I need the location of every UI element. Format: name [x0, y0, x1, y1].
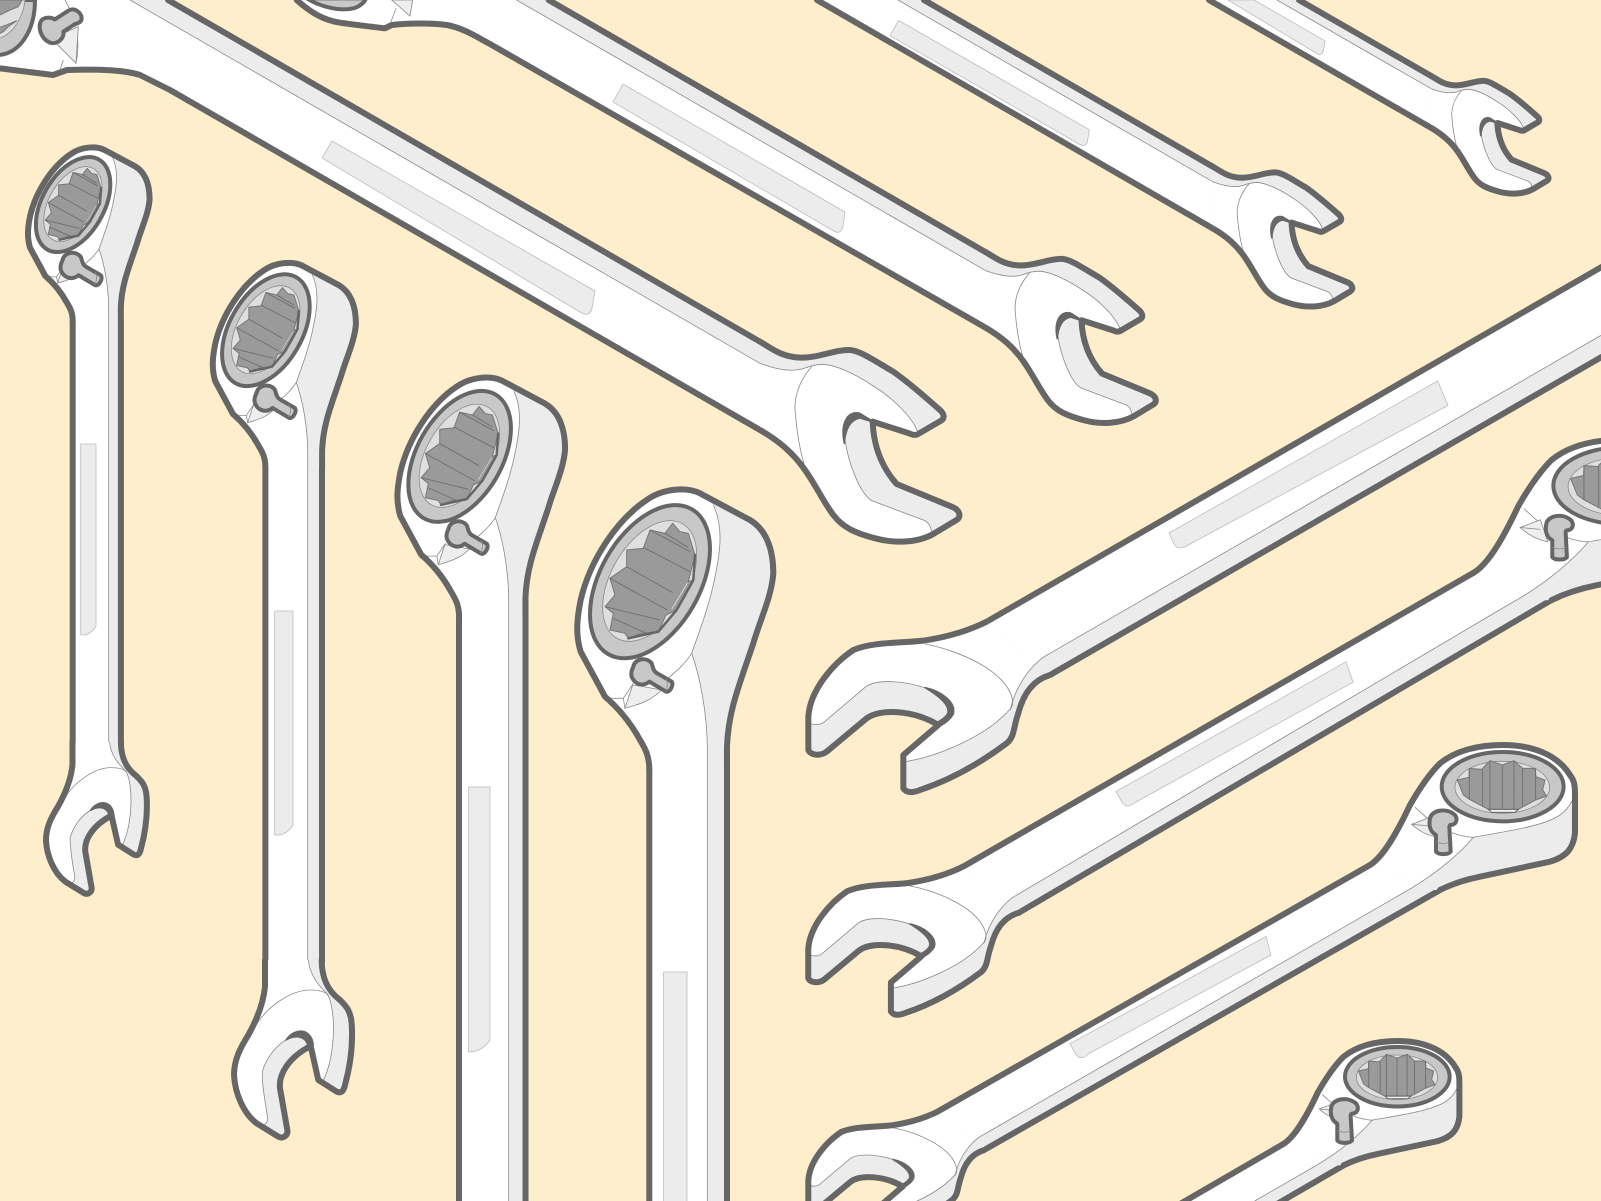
wrench: vertical 1 [20, 144, 150, 894]
wrench: fourth diagonal [1209, 0, 1548, 194]
wrench: second diagonal [297, 0, 1156, 423]
wrench: third diagonal [817, 0, 1352, 307]
wrench: upward diagonal 1 [808, 265, 1601, 792]
wrench: upward diagonal 4 [1180, 1041, 1459, 1201]
wrench: upward diagonal 2 [808, 440, 1601, 1015]
wrench: upward diagonal 3 [808, 745, 1575, 1201]
wrench: vertical 2 [204, 259, 356, 1137]
wrench: large diagonal top-left [0, 0, 959, 542]
wrench: vertical 4 [565, 484, 773, 1201]
wrench: vertical 3 [387, 373, 565, 1201]
